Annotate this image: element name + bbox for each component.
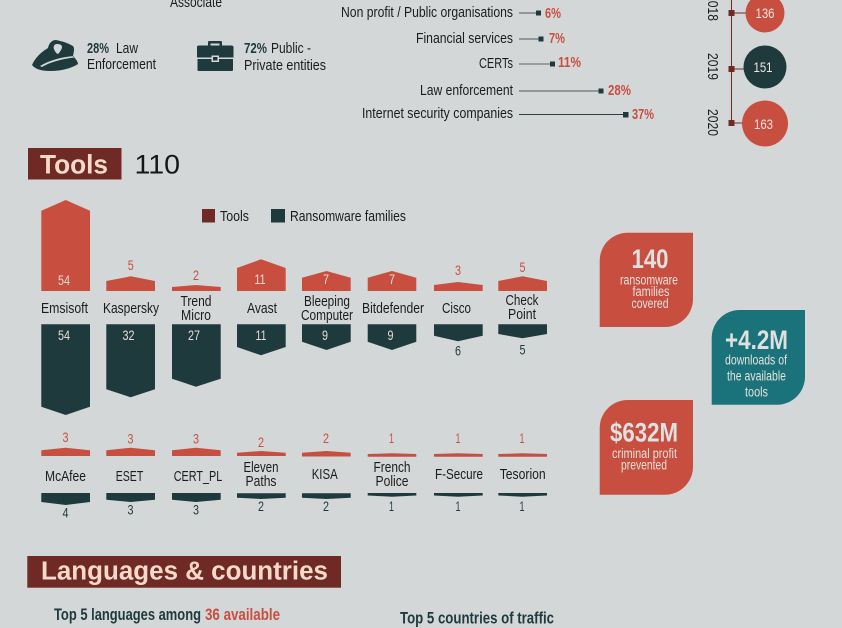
column: CERT_PL: CERT_PL <box>174 468 222 485</box>
column: ESET: 3 <box>128 503 134 518</box>
heading: languages and countries: Languages & countries <box>41 558 328 586</box>
legend: Ransomware families <box>290 208 406 225</box>
column: Trend Micro: Micro <box>181 307 211 324</box>
chart: tools and families per partner, row 1 <box>41 200 547 415</box>
column: Check Point: Check <box>506 292 539 309</box>
row: CERTs <box>479 54 581 72</box>
column: Bleeping Computer: Bleeping <box>304 293 350 310</box>
heading: tools: Tools <box>40 150 108 180</box>
callout: +4.2M downloads: tools <box>745 385 768 400</box>
icon: briefcase <box>197 41 234 71</box>
column: Kaspersky <box>103 258 159 397</box>
label: 28% law enforcement <box>87 40 157 73</box>
column: KISA: 2 <box>323 431 329 446</box>
row: law enforcement <box>420 82 631 99</box>
bubble: 2019 <box>704 46 786 88</box>
chart: sectors lollipop <box>341 4 654 123</box>
column: Bitdefender: 7 <box>389 272 395 287</box>
callout: +4.2M downloads: downloads of <box>725 352 787 368</box>
label: 28% law enforcement: Law <box>116 40 138 57</box>
callout: 140 ransomware families covered: covered <box>632 296 668 311</box>
column: Avast: 11 <box>254 272 266 287</box>
column: Check Point: Point <box>508 306 537 323</box>
column: Eleven Paths: 2 <box>258 435 264 450</box>
row: non profit: 6% <box>545 5 561 22</box>
callout: 140 ransomware families covered <box>600 233 693 327</box>
row: internet security companies: 37% <box>632 106 654 123</box>
row: CERTs: CERTs <box>479 55 513 72</box>
column: F-Secure <box>434 431 483 514</box>
column: Tesorion: Tesorion <box>500 466 546 483</box>
column: ESET <box>106 432 155 518</box>
bubble: 2020: 163 <box>754 117 773 132</box>
column: Bitdefender: Bitdefender <box>362 300 424 317</box>
callout: +4.2M downloads <box>712 310 805 405</box>
column: Trend Micro: 2 <box>193 268 199 283</box>
label: 28% law enforcement: 28% <box>87 40 109 57</box>
subheading: top 5 languages: Top 5 languages among <box>54 606 201 624</box>
law enforcement share <box>32 40 157 73</box>
column: French Police: 1 <box>389 499 394 514</box>
row: non profit: Non profit / Public organisations <box>341 4 513 21</box>
column: Emsisoft: 54 <box>58 328 70 343</box>
column: French Police: Police <box>376 473 408 490</box>
callout: 140 ransomware families covered: 140 <box>632 244 668 274</box>
column: Bleeping Computer <box>301 271 353 350</box>
column: KISA: KISA <box>312 466 338 483</box>
column: Emsisoft: Emsisoft <box>41 300 89 317</box>
label: 72% public-private: Private entities <box>244 57 326 74</box>
callout: $632M criminal profit prevented: prevented <box>621 458 667 473</box>
column: Avast <box>237 259 286 355</box>
label: 72% public-private: 72% <box>244 40 267 57</box>
column: Avast: 11 <box>256 328 266 343</box>
column: Eleven Paths <box>237 435 286 514</box>
column: Eleven Paths: Eleven <box>244 459 278 476</box>
column: Avast: Avast <box>247 300 278 317</box>
column: Emsisoft: 54 <box>58 273 70 288</box>
column: F-Secure: F-Secure <box>435 466 483 483</box>
column: Check Point <box>498 260 547 358</box>
column: Cisco <box>434 263 483 359</box>
column: French Police <box>368 431 416 514</box>
column: McAfee: 3 <box>62 430 68 445</box>
column: F-Secure: 1 <box>456 499 460 514</box>
column: ESET: ESET <box>116 468 143 485</box>
column: French Police: French <box>374 459 410 476</box>
column: ESET: 3 <box>128 432 134 446</box>
subheading: top 5 countries: Top 5 countries of traffic <box>400 610 554 628</box>
column: Kaspersky: 5 <box>128 258 134 273</box>
column: Bleeping Computer: 9 <box>322 328 328 343</box>
bubble: 2019: 2019 <box>704 53 721 80</box>
row: CERTs: 11% <box>558 54 581 71</box>
column: KISA: 2 <box>323 499 329 514</box>
column: Eleven Paths: Paths <box>246 473 276 490</box>
row: financial services: 7% <box>549 30 565 47</box>
column: Trend Micro: 27 <box>188 328 200 343</box>
legend <box>202 208 406 225</box>
public-private share <box>197 40 326 74</box>
row: financial services: Financial services <box>416 30 513 47</box>
column: CERT_PL: 3 <box>193 503 199 518</box>
column: McAfee: 4 <box>62 506 69 521</box>
column: Cisco: Cisco <box>442 300 471 317</box>
callout: +4.2M downloads: +4.2M <box>725 325 788 355</box>
column: CERT_PL <box>172 432 222 518</box>
column: Trend Micro <box>172 268 221 387</box>
column: McAfee: McAfee <box>45 468 86 485</box>
bubble: 2018 <box>704 0 784 32</box>
column: Trend Micro: Trend <box>180 293 212 310</box>
bubble: 2020 <box>704 100 788 146</box>
column: McAfee <box>41 430 90 521</box>
heading: tools <box>28 148 180 180</box>
column: French Police: 1 <box>389 431 394 446</box>
column: Bleeping Computer: 7 <box>323 272 329 287</box>
callout: $632M criminal profit prevented: $632M <box>610 418 678 448</box>
column: Tesorion <box>498 431 547 514</box>
chart: yearly timeline bubbles <box>704 0 788 146</box>
row: internet security companies <box>362 105 654 123</box>
column: F-Secure: 1 <box>456 431 460 446</box>
callout: $632M criminal profit prevented: criminal profit <box>612 446 677 461</box>
column: Check Point: 5 <box>520 343 526 358</box>
label: 72% public-private: Public - <box>271 40 311 57</box>
chart: tools and families per partner, row 2 <box>41 430 547 521</box>
heading: tools: 110 <box>134 150 180 180</box>
column: Cisco: 3 <box>455 263 461 278</box>
column: Bitdefender: 9 <box>388 328 394 343</box>
icon: police cap <box>32 40 78 71</box>
column: Eleven Paths: 2 <box>258 499 264 514</box>
callout: +4.2M downloads: the available <box>727 369 786 384</box>
column: CERT_PL: 3 <box>193 432 199 446</box>
callout: 140 ransomware families covered: ransomware <box>620 272 678 288</box>
column: Emsisoft <box>41 200 90 415</box>
bubble: 2018: 136 <box>756 6 774 21</box>
row: law enforcement: Law enforcement <box>420 82 514 99</box>
subheading: top 5 languages: 36 available <box>205 606 280 624</box>
column: Tesorion: 1 <box>520 499 524 514</box>
column: Bitdefender <box>362 271 424 350</box>
column: Bleeping Computer: Computer <box>301 307 353 324</box>
column: Tesorion: 1 <box>520 431 524 446</box>
callout: 140 ransomware families covered: families <box>632 284 670 299</box>
column: Kaspersky: 32 <box>122 328 134 343</box>
column: KISA <box>302 431 351 514</box>
callout: $632M criminal profit prevented <box>600 400 693 495</box>
label: 72% public-private <box>244 40 326 74</box>
label: 28% law enforcement: Enforcement <box>87 56 157 73</box>
column: Kaspersky: Kaspersky <box>103 300 159 317</box>
legend: Tools <box>220 208 249 225</box>
row: law enforcement: 28% <box>608 82 631 99</box>
bubble: 2019: 151 <box>754 60 772 75</box>
bubble: 2020: 2020 <box>704 109 721 136</box>
column: Cisco: 6 <box>455 344 461 359</box>
row: internet security companies: Internet security companies <box>362 105 513 122</box>
column: Check Point: 5 <box>520 260 526 275</box>
